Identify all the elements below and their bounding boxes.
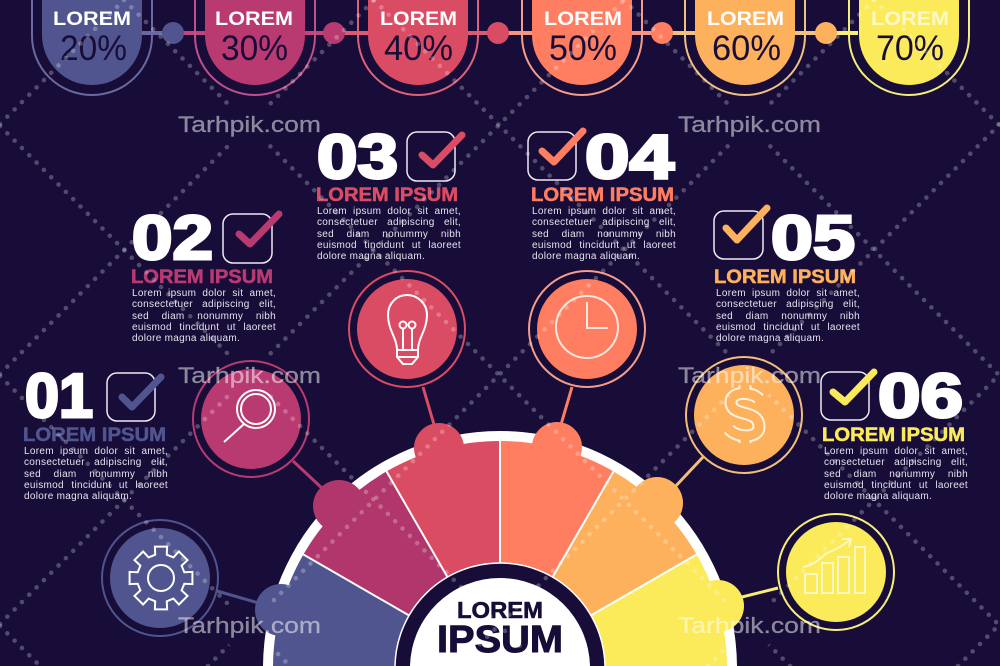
panel 06: LOREM IPSUM xyxy=(822,425,965,446)
panel 02: sed diam nonummy nibh xyxy=(132,311,276,322)
pill: 60%: 60% xyxy=(712,29,781,68)
panel 02 xyxy=(131,204,282,348)
icon: dollar xyxy=(686,357,802,473)
panel 05 xyxy=(714,204,866,348)
panel 02: consectetuer adipiscing elit, xyxy=(132,299,276,310)
pill: 40% xyxy=(358,0,478,95)
pill: 70%: LOREM xyxy=(871,9,949,30)
pill: 50% xyxy=(522,0,642,95)
pill: 50%: LOREM xyxy=(544,9,622,30)
panel 02: LOREM IPSUM xyxy=(131,267,273,288)
panel 05: sed diam nonummy nibh xyxy=(716,311,860,322)
panel 02: euismod tincidunt ut laoreet xyxy=(132,322,276,333)
center hub: LOREM xyxy=(457,597,543,623)
pill: 70% xyxy=(849,0,969,95)
panel 01: 01 xyxy=(25,362,93,431)
panel 06 xyxy=(821,362,974,506)
watermark text: Tarhpik.com xyxy=(678,112,821,137)
pill: 20%: 20% xyxy=(60,29,127,68)
panel 01: LOREM IPSUM xyxy=(23,425,166,446)
panel 04 xyxy=(528,123,682,266)
panel 04: euismod tincidunt ut laoreet xyxy=(532,240,676,251)
panel 05: consectetuer adipiscing elit, xyxy=(716,299,860,310)
segment: yellow xyxy=(500,554,727,666)
watermark text xyxy=(178,112,821,638)
panel 03: dolore magna aliquam. xyxy=(317,251,425,262)
fan bumps xyxy=(255,422,744,636)
panel 04: sed diam nonummy nibh xyxy=(532,229,676,240)
pill: 60% xyxy=(685,0,805,95)
panel 05: 05 xyxy=(771,204,855,273)
panel 06: consectetuer adipiscing elit, xyxy=(824,457,968,468)
panel 01: consectetuer adipiscing elit, xyxy=(24,457,168,468)
panel 01 xyxy=(23,362,174,506)
icon: growth chart xyxy=(778,514,894,630)
watermark text: Tarhpik.com xyxy=(678,613,821,638)
panel 05: LOREM IPSUM xyxy=(714,267,856,288)
watermark text: Tarhpik.com xyxy=(678,363,821,388)
panel 01: Lorem ipsum dolor sit amet, xyxy=(24,446,168,457)
icon: gear xyxy=(102,520,218,636)
panel 05: dolore magna aliquam. xyxy=(716,333,824,344)
panel 04: 04 xyxy=(585,123,675,192)
pill: 60%: LOREM xyxy=(707,9,784,30)
segment: coral xyxy=(500,441,614,666)
panel 05: euismod tincidunt ut laoreet xyxy=(716,322,860,333)
watermark text: Tarhpik.com xyxy=(178,613,321,638)
panel 04: Lorem ipsum dolor sit amet, xyxy=(532,206,676,217)
pill: 30% xyxy=(195,0,315,95)
panel 04: dolore magna aliquam. xyxy=(532,251,640,262)
watermark text: Tarhpik.com xyxy=(178,112,321,137)
panel 03: Lorem ipsum dolor sit amet, xyxy=(317,206,461,217)
semicircle fan chart xyxy=(255,422,744,666)
pill: 20%: LOREM xyxy=(53,9,131,30)
panel 06: Lorem ipsum dolor sit amet, xyxy=(824,446,968,457)
pill: 30%: 30% xyxy=(221,29,288,68)
panel 05: Lorem ipsum dolor sit amet, xyxy=(716,288,860,299)
panel 03: consectetuer adipiscing elit, xyxy=(317,217,461,228)
connectors from fan to icons xyxy=(217,387,778,604)
panel 03: sed diam nonummy nibh xyxy=(317,229,461,240)
panel 02: Lorem ipsum dolor sit amet, xyxy=(132,288,276,299)
pill: 40%: 40% xyxy=(384,29,453,68)
pill: 40%: LOREM xyxy=(380,9,457,30)
pill: 20% xyxy=(32,0,152,95)
panel 01: sed diam nonummy nibh xyxy=(24,469,168,480)
panel 03: LOREM IPSUM xyxy=(316,185,458,206)
center hub: IPSUM xyxy=(437,619,563,661)
icon: clock xyxy=(529,271,645,387)
pill: 50%: 50% xyxy=(549,29,617,68)
connector line row xyxy=(142,31,858,35)
panel 01: euismod tincidunt ut laoreet xyxy=(24,480,168,491)
panel 02: 02 xyxy=(132,204,213,273)
panel 02: dolore magna aliquam. xyxy=(132,333,240,344)
panel 03 xyxy=(316,123,467,266)
segment: red xyxy=(386,441,500,666)
panel 06: dolore magna aliquam. xyxy=(824,491,932,502)
panel 03: euismod tincidunt ut laoreet xyxy=(317,240,461,251)
icon: magnifier xyxy=(193,361,309,477)
icon: light bulb xyxy=(349,271,465,387)
pill: 30%: LOREM xyxy=(215,9,293,30)
watermark text: Tarhpik.com xyxy=(178,363,321,388)
panel 06: euismod tincidunt ut laoreet xyxy=(824,480,968,491)
panel 01: dolore magna aliquam. xyxy=(24,491,132,502)
panel 06: sed diam nonummy nibh xyxy=(824,469,968,480)
pill: 70%: 70% xyxy=(876,29,944,68)
segment: orange xyxy=(500,471,697,666)
center hub xyxy=(395,563,605,666)
panel 04: consectetuer adipiscing elit, xyxy=(532,217,676,228)
panel 03: 03 xyxy=(317,123,398,192)
segment: blue xyxy=(273,554,500,666)
segment: magenta xyxy=(303,471,500,666)
timeline nodes xyxy=(162,22,837,44)
panel 06: 06 xyxy=(878,362,963,431)
panel 04: LOREM IPSUM xyxy=(531,185,674,206)
